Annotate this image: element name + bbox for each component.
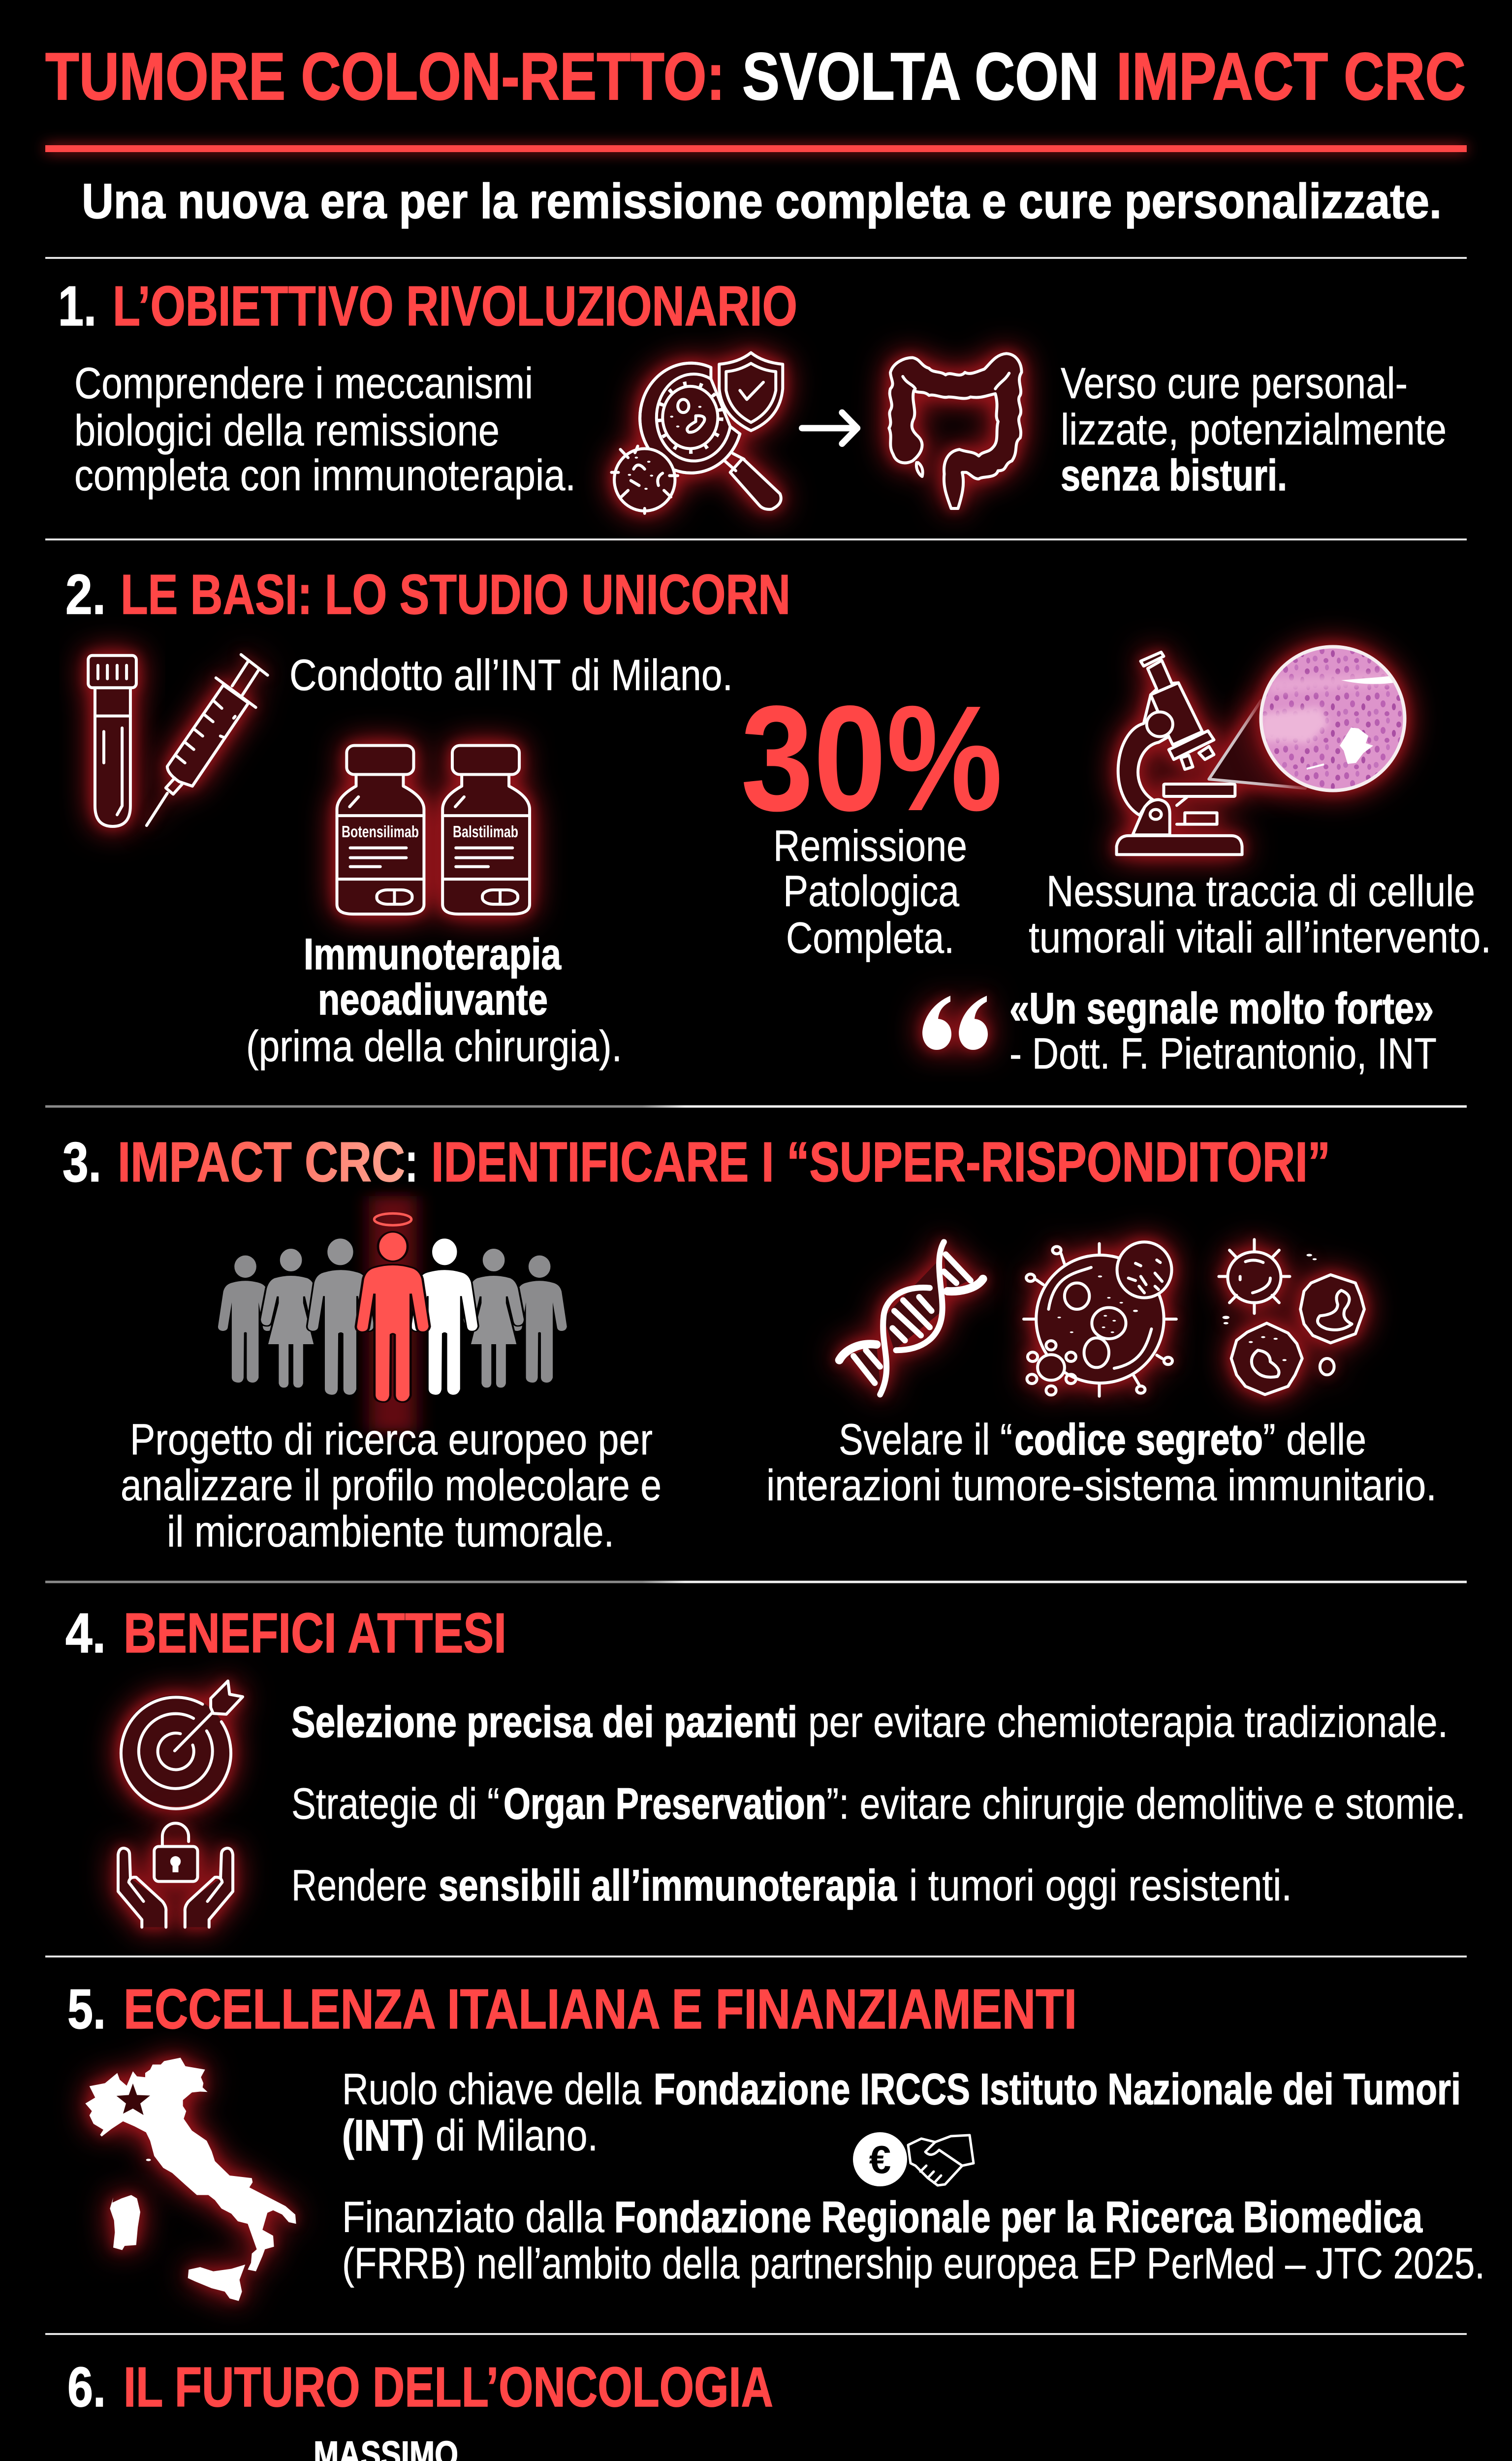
text: svelare: ” delle — [1263, 1415, 1366, 1464]
icon: quote — [922, 996, 988, 1050]
heading 1: 1. — [58, 275, 96, 338]
icon: microscope — [1117, 652, 1305, 854]
heading 3: IMPACT CRC — [118, 1131, 405, 1194]
text: svelare: Svelare il “ — [839, 1415, 1012, 1464]
text: progetto di ricerca — [121, 1415, 662, 1556]
icon: euro coin: € — [869, 2138, 891, 2181]
icon: map of italy with star on milan — [85, 2058, 296, 2301]
text: selezione — [291, 1697, 1448, 1746]
heading 2: 2. — [65, 564, 106, 626]
text: comprendere — [74, 358, 576, 500]
panel: section 2 studio unicorn — [65, 564, 1491, 1078]
icon: magnifier with germ and shield — [611, 353, 783, 513]
heading 4: 4. — [65, 1602, 106, 1665]
icon: dna — [839, 1242, 983, 1394]
heading 3: 3. — [63, 1131, 101, 1194]
heading 5: 5. — [67, 1978, 106, 2041]
icon: test tube — [88, 656, 136, 826]
heading 6: IL FUTURO DELL’ONCOLOGIA — [124, 2356, 773, 2419]
text: organ preservation — [291, 1779, 1466, 1828]
text: ruolo chiave: di Milano. — [436, 2111, 598, 2160]
heading 3 — [63, 1131, 1330, 1194]
panel: section 6 futuro dell'oncologia — [67, 2356, 1419, 2461]
icon: tumour cell — [1024, 1242, 1176, 1396]
heading 6: 6. — [67, 2356, 106, 2419]
text: ruolo chiave: Ruolo chiave della — [342, 2064, 641, 2114]
text: organ preservation: Organ Preservation — [504, 1779, 826, 1828]
text: rendere sensibili: sensibili all’immunoterapia — [439, 1861, 897, 1910]
red title rule — [45, 145, 1467, 152]
text: comprendere: Comprendere i meccanismi — [74, 358, 533, 408]
text: spostamento — [526, 2454, 1410, 2461]
text: comprendere: biologici della remissione — [74, 406, 500, 455]
text: remissione — [773, 821, 967, 962]
icon: group of people with highlighted super-responder — [218, 1196, 567, 1432]
text: nessuna traccia — [1029, 866, 1491, 962]
panel: section 4 benefici attesi — [65, 1602, 1466, 1927]
title — [45, 39, 1466, 114]
text: immunoterapia — [246, 929, 622, 1071]
text: finanziato: Finanziato dalla — [342, 2192, 604, 2241]
icon: bottles: Balstilimab — [453, 822, 518, 841]
text: organ preservation: Strategie di “ — [291, 1779, 500, 1828]
text: verso cure: Verso cure personal- — [1061, 358, 1408, 408]
text: remissione: Completa. — [786, 913, 954, 962]
stat: 30%: 30% — [741, 674, 1003, 842]
icon: euro coin — [853, 2132, 907, 2186]
heading 2: LE BASI: LO STUDIO UNICORN — [121, 564, 790, 626]
icon: immune cells — [1219, 1239, 1364, 1394]
text: progetto di ricerca: analizzare il profilo molecolare e — [121, 1460, 662, 1510]
text: svelare: interazioni tumore-sistema immunitario. — [766, 1460, 1437, 1510]
tissue magnified circle — [1255, 640, 1413, 797]
panel: section 3 impact crc — [63, 1131, 1437, 1556]
text: progetto di ricerca: il microambiente tumorale. — [167, 1507, 614, 1556]
icon: syringe — [147, 655, 268, 825]
heading 3: IDENTIFICARE I “SUPER-RISPONDITORI” — [431, 1131, 1330, 1194]
heading 3: : — [405, 1131, 418, 1194]
text: ruolo chiave — [342, 2064, 1461, 2160]
text: condotto: Condotto all’INT di Milano. — [289, 650, 733, 699]
text: rendere sensibili: Rendere — [291, 1861, 427, 1910]
text: ruolo chiave: (INT) — [342, 2111, 424, 2160]
heading 1: L’OBIETTIVO RIVOLUZIONARIO — [113, 275, 797, 338]
text: progetto di ricerca: Progetto di ricerca europeo per — [130, 1415, 653, 1464]
arrow — [802, 412, 857, 443]
text: immunoterapia: Immunoterapia — [304, 929, 562, 978]
icon: handshake — [908, 2135, 974, 2185]
text: selezione: Selezione precisa dei pazienti — [291, 1697, 797, 1746]
text: svelare: codice segreto — [1014, 1415, 1263, 1464]
text: remissione: Remissione — [773, 821, 967, 870]
text: rendere sensibili — [291, 1861, 1292, 1910]
text: svelare — [766, 1415, 1437, 1510]
text: finanziato — [342, 2192, 1485, 2288]
text: rendere sensibili: i tumori oggi resistenti. — [909, 1861, 1292, 1910]
text: immunoterapia: neoadiuvante — [318, 975, 548, 1024]
quote text — [1009, 983, 1437, 1078]
quote text: - Dott. F. Pietrantonio, INT — [1009, 1029, 1437, 1078]
panel: section 5 eccellenza italiana — [67, 1978, 1485, 2301]
text: immunoterapia: (prima della chirurgia). — [246, 1021, 622, 1071]
icon: target and arrow — [120, 1681, 243, 1809]
icon: hands holding padlock — [118, 1823, 233, 1927]
text: verso cure: senza bisturi. — [1061, 450, 1287, 500]
icon: bottles — [337, 746, 530, 914]
icon: bottles: Botensilimab — [342, 822, 419, 841]
panel: section 1 obiettivo rivoluzionario — [58, 275, 1447, 513]
title: SVOLTA CON — [742, 39, 1099, 114]
title: TUMORE COLON-RETTO: — [45, 39, 725, 114]
icon: colon — [889, 353, 1022, 508]
text: remissione: Patologica — [783, 866, 959, 915]
text: verso cure: lizzate, potenzialmente — [1061, 405, 1447, 454]
heading 4: BENEFICI ATTESI — [124, 1602, 506, 1665]
text: comprendere: completa con immunoterapia. — [74, 450, 576, 500]
heading 5: ECCELLENZA ITALIANA E FINANZIAMENTI — [124, 1978, 1077, 2041]
text: verso cure — [1061, 358, 1447, 500]
